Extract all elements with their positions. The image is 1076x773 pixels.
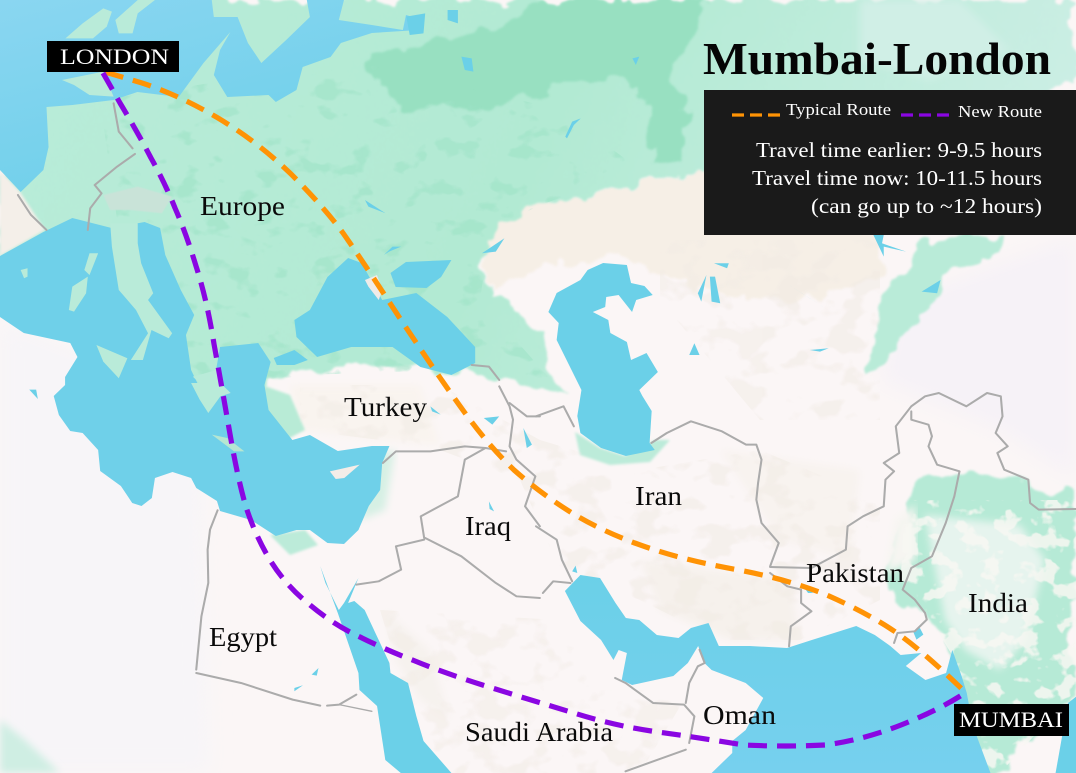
route: typical (orange dashed) (105, 72, 965, 692)
text: travel times: Travel time now: 10-11.5 hours (752, 166, 1042, 190)
sea: Caspian (548, 263, 658, 456)
region labels: Europe (200, 191, 285, 221)
region labels: Iran (635, 481, 683, 511)
region labels: Pakistan (806, 558, 905, 588)
city label: London: LONDON (60, 44, 169, 69)
sea: Atlantic and Baltic (0, 0, 424, 192)
city label: Mumbai: MUMBAI (959, 707, 1063, 732)
small lakes and rivers (29, 10, 941, 691)
sea: Black Sea (294, 258, 475, 375)
sea: Sea of Azov (390, 260, 451, 288)
text: travel times: Travel time earlier: 9-9.5 hours (756, 138, 1042, 162)
legend: typical route: Typical Route (786, 100, 891, 119)
region labels: Egypt (209, 622, 278, 652)
legend: new route: New Route (958, 102, 1042, 121)
sea: Marmara (274, 350, 308, 365)
sea: Red Sea (320, 566, 451, 773)
region labels: Iraq (465, 511, 512, 541)
seas, right half: Caspian, Persian Gulf, Arabian Sea, Bay of Bengal (548, 263, 1076, 773)
text: travel times: (can go up to ~12 hours) (811, 194, 1042, 218)
city label: London (47, 41, 179, 72)
region labels: Oman (703, 700, 777, 730)
panel: legend and travel times (704, 90, 1076, 235)
sea: Persian Gulf and Arabian Sea (565, 575, 991, 773)
route: new (purple dashed) (103, 73, 965, 746)
region labels (200, 191, 1028, 747)
seas, left half: Atlantic, Baltic, Mediterranean, Black Sea, Red Sea (0, 0, 475, 773)
title: Mumbai-London (703, 33, 1051, 84)
sea: Bay of Bengal (1056, 683, 1076, 773)
islands and peninsulas (21, 0, 382, 390)
city label: Mumbai (954, 704, 1069, 736)
text: travel times (752, 138, 1042, 218)
land cover: dark green forest of Russia (370, 0, 1010, 165)
sea: Mediterranean (0, 218, 389, 544)
region labels: India (968, 588, 1028, 618)
region labels: Turkey (344, 392, 428, 422)
region labels: Saudi Arabia (465, 717, 613, 747)
